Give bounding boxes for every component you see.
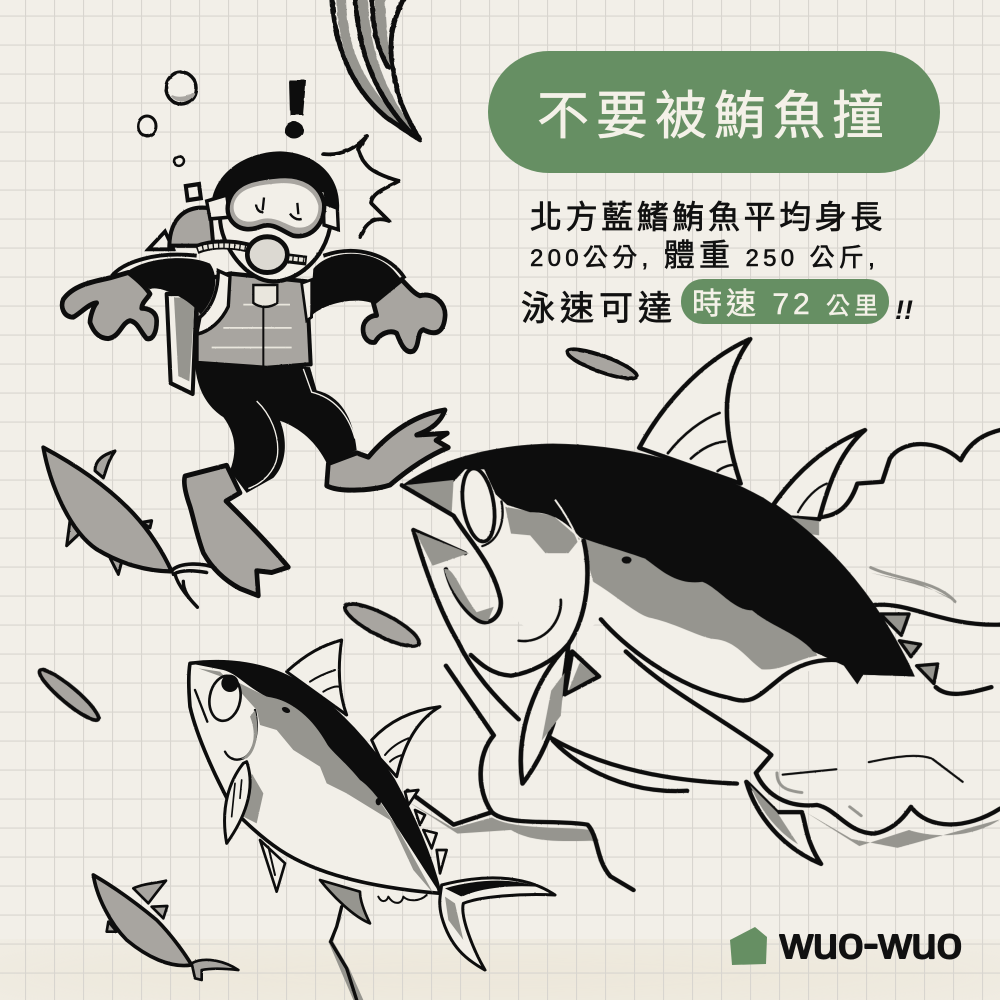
- wake below fish: [328, 913, 363, 1000]
- big tuna with wake: [402, 339, 1000, 890]
- body shade: [198, 668, 433, 893]
- dorsal fin: [639, 339, 750, 484]
- regulator and hose: [197, 237, 307, 272]
- exclamation mark: [284, 80, 306, 138]
- cheek line: [519, 600, 561, 641]
- tail: [440, 878, 555, 970]
- anal fin: [746, 782, 821, 864]
- head and hood: [207, 151, 339, 281]
- pectoral fin: [521, 644, 599, 784]
- arms: [112, 251, 405, 317]
- speed highlight pill: [681, 279, 889, 324]
- belly outlines: [549, 619, 840, 791]
- tail tip: [844, 648, 915, 684]
- body fill: [402, 444, 913, 699]
- snout shade: [404, 480, 454, 512]
- black back: [190, 662, 440, 893]
- lower fins: [320, 880, 370, 923]
- small fish bottom: [93, 875, 238, 980]
- eye: [206, 673, 244, 723]
- description line 3: 泳速可達: [521, 290, 677, 328]
- tank: [148, 184, 213, 394]
- small fish left: [43, 447, 215, 607]
- vest: [197, 271, 312, 368]
- bubbles: [138, 72, 196, 168]
- second dorsal fin: [773, 430, 865, 519]
- medium tuna: [189, 640, 555, 1000]
- face lines: [195, 690, 257, 760]
- eye: [458, 467, 499, 543]
- icon: house: [730, 927, 767, 965]
- logo: [730, 919, 962, 968]
- legs: [195, 364, 357, 493]
- left glove: [62, 272, 157, 339]
- fins behind body: [287, 640, 347, 715]
- finlets: [405, 790, 447, 873]
- right glove: [363, 280, 445, 352]
- gill highlight: [555, 500, 588, 576]
- belly shade: [505, 507, 817, 669]
- finlets: [880, 614, 938, 684]
- head outline: [402, 485, 587, 719]
- diver: [62, 151, 448, 596]
- black back: [402, 444, 915, 684]
- pectoral fin with shadow: [243, 773, 263, 823]
- title pill: [488, 51, 940, 173]
- top fin entering from the top: [332, 0, 420, 140]
- body: [189, 662, 440, 893]
- description line 2: 200公分, 體重 250 公斤,: [530, 238, 875, 273]
- left flipper: [184, 465, 288, 596]
- title text: 不要被鮪魚撞: [537, 88, 891, 146]
- speed highlight pill: 時速 72 公里: [692, 288, 878, 321]
- exclamation marks: !!: [895, 295, 913, 325]
- lower jaw shade: [415, 532, 494, 621]
- brand name: wuo-wuo: [779, 919, 962, 968]
- wake outlines: [408, 430, 1000, 890]
- capsule shapes: [35, 344, 640, 726]
- right flipper: [327, 410, 448, 490]
- surprise burst lines: [323, 136, 399, 237]
- description line 1: 北方藍鰭鮪魚平均身長: [530, 199, 886, 235]
- wake shadows: [408, 573, 1000, 848]
